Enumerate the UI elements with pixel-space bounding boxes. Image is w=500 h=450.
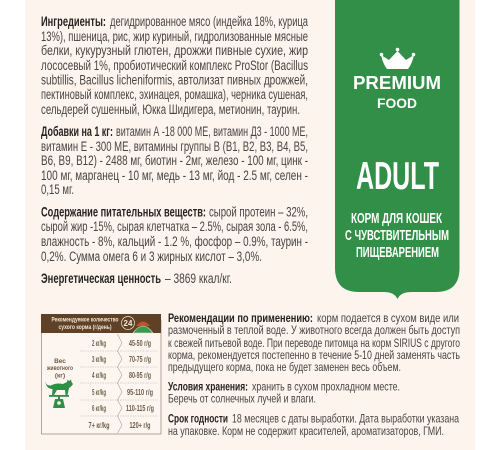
table rows	[88, 339, 154, 430]
icon: cat on scale	[45, 380, 73, 408]
text block: additives: 100 мг, марганец - 10 мг, медь - 13 мг, йод - 2.5 мг, селен -	[41, 168, 308, 183]
icon: 24 hours: 24	[124, 319, 133, 328]
header caption: сухого корма (г/день)	[58, 324, 112, 331]
heading: adult: ADULT	[356, 155, 439, 198]
label: pet weight: Вес	[54, 358, 66, 365]
text block: ingredients: subtillis, Bacillus licheniformis, автолизат пивных дрожжей,	[41, 72, 308, 88]
text block: additives: витамин А -18 000 МЕ, витамин Д3 - 1000 МЕ,	[116, 124, 308, 139]
table rows: 110-115 г/g	[126, 404, 154, 413]
subtitle: product description	[345, 211, 449, 261]
text block: storage conditions: хранить в сухом прохладном месте.	[252, 380, 400, 394]
text block: ingredients	[41, 14, 308, 117]
table rows: 45-50 г/g	[129, 339, 151, 348]
panel: green premium banner	[335, 0, 460, 299]
icon: food bowl	[133, 322, 153, 333]
text block: nutrients: влажность - 8%, кальций - 1.2 %, фосфор – 0.9%, таурин -	[41, 234, 308, 249]
text block: usage recommendations: предыдущего корма, пока не будет заменен весь объем.	[168, 360, 401, 374]
text block: shelf life	[168, 412, 459, 438]
row separators	[80, 351, 158, 416]
text block: additives: витамин Е - 300 МЕ, витамины группы В (В1, В2, В3, В4, В5,	[41, 139, 308, 154]
text block: nutrients	[41, 204, 308, 264]
text block: ingredients: пектиновый комплекс, эхинацея, ромашка), черника сушеная,	[41, 87, 308, 102]
label: pet weight	[46, 358, 73, 380]
table rows: 95-110 г/g	[127, 388, 153, 397]
text block: nutrients: Содержание питательных веществ:	[41, 204, 206, 220]
text block: ingredients: Ингредиенты:	[41, 14, 106, 29]
label: food: FOOD	[377, 96, 417, 111]
table header	[41, 314, 161, 333]
table frame	[42, 320, 161, 434]
text block: nutrients: сырой жир -15%, сырая клетчатка – 2.5%, сырая зола - 6.5%,	[41, 219, 308, 234]
text block: additives: В6, В9, В12) - 2488 мг, биотин - 2мг, железо - 100 мг, цинк -	[41, 153, 308, 168]
subtitle: product description: ПИЩЕВАРЕНИЕМ	[356, 245, 439, 261]
text block: ingredients: сельдерей сушенный, Юкка Шидигера, метионин, таурин.	[41, 102, 300, 117]
text block: storage conditions: Беречь от солнечных лучей и влаги.	[168, 392, 316, 406]
subtitle: product description: С ЧУВСТВИТЕЛЬНЫМ	[345, 228, 449, 244]
table rows: 2 кг/kg	[92, 339, 106, 348]
label: pet weight: животного	[46, 365, 73, 372]
icon: crown	[380, 48, 415, 69]
text block: ingredients: дегидрированное мясо (индейка 18%, курица	[110, 14, 308, 29]
header caption	[52, 316, 118, 331]
table rows: 80-95 г/g	[129, 371, 151, 380]
text block: usage recommendations	[168, 311, 460, 374]
text block: energy value: Энергетическая ценность	[41, 271, 161, 286]
text block: energy value: – 3869 ккал/кг.	[165, 271, 232, 286]
table rows: 6 кг/kg	[92, 404, 106, 413]
text block: additives: Добавки на 1 кг:	[41, 124, 113, 139]
text block: usage recommendations: Рекомендации по применению:	[168, 311, 313, 325]
text block: ingredients: лососевый 1%, пробиотический комплекс ProStor (Bacillus	[41, 58, 308, 73]
table rows: 5 кг/kg	[92, 388, 106, 397]
table rows: 3 кг/kg	[92, 355, 106, 364]
text block: nutrients: 0,2%. Сумма омега 6 и 3 жирных кислот – 3,0%.	[41, 249, 262, 264]
label: premium: PREMIUM	[353, 73, 441, 93]
banner shape	[335, 0, 460, 299]
text block: nutrients: сырой протеин – 32%,	[209, 204, 308, 220]
text block: additives: 0,15 мг.	[41, 182, 74, 197]
text block: additives	[41, 124, 308, 197]
text block: storage conditions: Условия хранения:	[168, 380, 248, 394]
header caption: Рекомендуемое количество	[52, 316, 118, 324]
text block: shelf life: Срок годности	[168, 412, 228, 426]
table rows: 70-75 г/g	[129, 355, 151, 364]
table rows: 7+ кг/kg	[88, 421, 110, 430]
subtitle: product description: КОРМ ДЛЯ КОШЕК	[351, 211, 442, 227]
text block: storage conditions	[168, 380, 400, 406]
table rows: 120+ г/g	[130, 421, 151, 430]
panel: feeding table	[41, 314, 161, 434]
text block: ingredients: белки, кукурузный глютен, дрожжи пивные сухие, жир	[41, 43, 308, 58]
label: pet weight: (кг)	[55, 372, 65, 380]
chevrons	[118, 334, 122, 433]
text block: ingredients: 13%), пшеница, рис, жир куриный, гидролизованные мясные	[41, 29, 308, 44]
text block: usage recommendations: корм подается в сухом виде или	[317, 311, 459, 325]
table rows: 4 кг/kg	[92, 371, 106, 380]
